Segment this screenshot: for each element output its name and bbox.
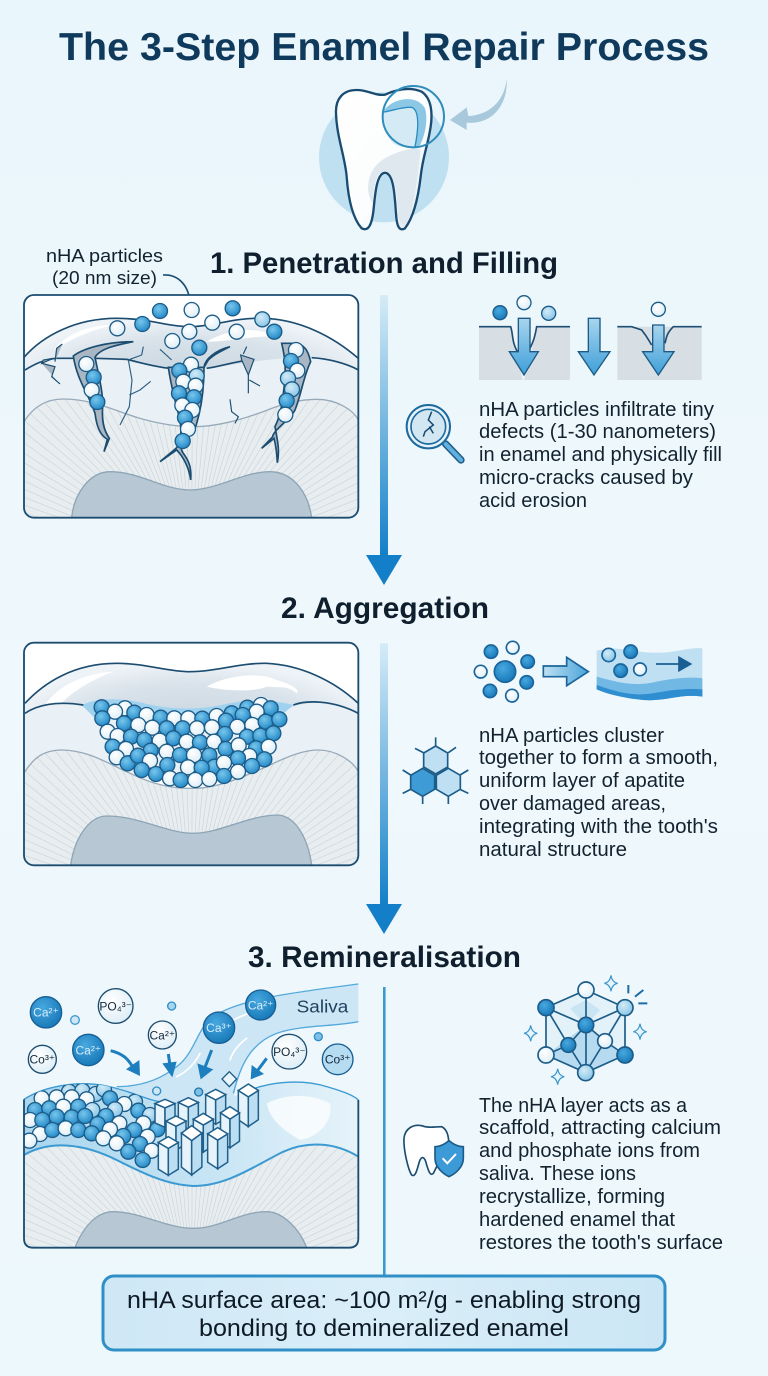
dentin layer xyxy=(24,1145,358,1248)
calcium and phosphate ions: Co³⁺ xyxy=(30,1053,55,1067)
label: saliva: Saliva xyxy=(297,997,348,1017)
icon: hexagon lattice xyxy=(403,737,468,804)
label: nHA particles size xyxy=(46,246,190,301)
heading: step 2: 2. Aggregation xyxy=(281,592,489,625)
arrow: step 1 to step 2 xyxy=(366,295,402,585)
text block: step 2 description: nHA particles cluster xyxy=(479,725,664,747)
icon: tooth with magnified enamel xyxy=(319,78,507,229)
panel: step 1 cracked enamel cross-section xyxy=(23,294,360,519)
callout: surface area fact xyxy=(103,1276,665,1350)
heading: step 3: 3. Remineralisation xyxy=(248,941,521,974)
arrow: step 2 to step 3 xyxy=(366,643,402,934)
label: nHA particles size: (20 nm size) xyxy=(52,268,157,288)
enamel outlines xyxy=(24,318,358,358)
enamel outlines xyxy=(25,663,358,703)
icon: particles forming a layer xyxy=(474,641,702,702)
text block: step 2 description xyxy=(479,725,718,861)
connector line: step 3 xyxy=(383,987,386,1277)
dentin layer xyxy=(25,430,358,517)
text block: step 1 description: nHA particles infiltrate tiny xyxy=(479,399,714,421)
text block: step 3 description: recrystallize, forming xyxy=(479,1186,665,1208)
title: The 3-Step Enamel Repair Process xyxy=(59,26,709,69)
icon: magnifier over crack xyxy=(407,405,461,460)
text block: step 2 description: over damaged areas, xyxy=(479,793,666,815)
pulp xyxy=(71,815,312,865)
text block: step 3 description: The nHA layer acts as a xyxy=(479,1095,688,1117)
callout: surface area fact: bonding to demineralized enamel xyxy=(199,1315,569,1342)
text block: step 3 description: hardened enamel that xyxy=(479,1209,675,1231)
panel frame xyxy=(24,643,358,865)
calcium and phosphate ions: Co³⁺ xyxy=(325,1053,350,1067)
nHA particles in enamel xyxy=(22,1082,165,1167)
apatite crystals xyxy=(155,1084,258,1175)
callout: surface area fact: nHA surface area: ~100 m²/g - enabling strong xyxy=(127,1287,641,1314)
label: nHA particles size: nHA particles xyxy=(46,246,163,266)
enamel layer xyxy=(25,664,358,712)
panel frame xyxy=(24,295,358,518)
text block: step 2 description: uniform layer of apatite xyxy=(479,770,685,792)
cracks xyxy=(73,342,133,452)
text block: step 3 description: restores the tooth's surface xyxy=(479,1232,723,1254)
panel frame xyxy=(24,1099,358,1248)
text block: step 1 description: defects (1-30 nanometers) xyxy=(479,421,716,443)
text block: step 1 description: in enamel and physically fill xyxy=(479,444,722,466)
calcium and phosphate ions: PO₄³⁻ xyxy=(99,999,132,1013)
calcium and phosphate ions: Ca²⁺ xyxy=(150,1028,175,1042)
enamel layer xyxy=(25,319,358,369)
text block: step 1 description xyxy=(479,399,722,512)
text block: step 3 description xyxy=(479,1095,723,1254)
text block: step 3 description: scaffold, attracting calcium xyxy=(479,1117,721,1139)
pulp xyxy=(72,472,312,518)
dentin layer xyxy=(25,780,358,864)
calcium and phosphate ions: Ca²⁺ xyxy=(248,998,273,1012)
text block: step 3 description: and phosphate ions from xyxy=(479,1140,700,1162)
small ions xyxy=(71,1002,322,1096)
icon: tooth with shield xyxy=(404,1125,463,1177)
calcium and phosphate ions: Ca³⁺ xyxy=(206,1021,232,1035)
nHA particle cluster xyxy=(94,697,287,787)
nHA particles xyxy=(79,301,305,448)
calcium and phosphate ions: PO₄³⁻ xyxy=(273,1045,306,1059)
text block: step 2 description: integrating with the tooth's xyxy=(479,816,718,838)
panel: step 3 remineralisation cross-section xyxy=(22,984,358,1376)
text block: step 3 description: saliva. These ions xyxy=(479,1163,636,1185)
arrows: ions to surface xyxy=(111,1050,267,1079)
heading: step 1: 1. Penetration and Filling xyxy=(210,247,558,280)
enamel band xyxy=(24,1082,358,1186)
text block: step 2 description: natural structure xyxy=(479,839,627,861)
panel: step 2 aggregated particle layer xyxy=(23,642,360,866)
text block: step 1 description: micro-cracks caused by xyxy=(479,467,693,489)
icon: crystal lattice with sparkles xyxy=(524,975,647,1085)
text block: step 1 description: acid erosion xyxy=(479,490,587,512)
pulp xyxy=(75,1212,307,1248)
calcium and phosphate ions xyxy=(28,989,353,1075)
text block: step 2 description: together to form a smooth, xyxy=(479,747,718,769)
saliva stream xyxy=(117,984,358,1107)
icons: particles entering defects xyxy=(479,296,702,383)
calcium and phosphate ions: Ca²⁺ xyxy=(33,1006,59,1020)
calcium and phosphate ions: Ca²⁺ xyxy=(76,1043,101,1057)
